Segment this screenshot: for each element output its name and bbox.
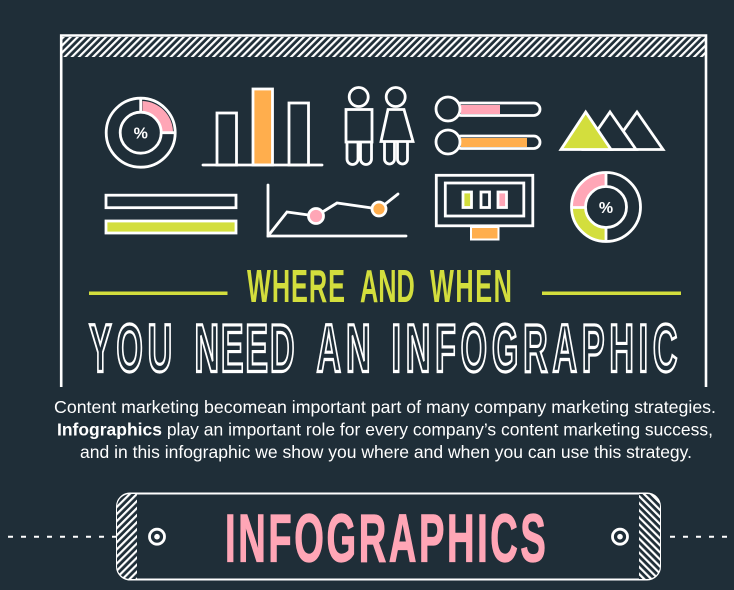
icon: horizontal bars (106, 195, 236, 233)
subheading: where and when: WHEN (430, 260, 513, 312)
icon: second donut chart with percent: % (599, 200, 613, 217)
title: you need an infographic: YOU (89, 311, 177, 387)
icon: donut chart with percent: % (134, 126, 148, 142)
icon: donut chart with percent (106, 98, 175, 167)
icon: man figure (346, 88, 372, 164)
banner text: INFOGRAPHICS (225, 500, 548, 576)
subheading: where and when: AND (360, 260, 415, 312)
icon: bar chart (203, 89, 322, 165)
frame with hatched top band (61, 36, 706, 387)
intro paragraph: Content marketing becomean important part of many company marketing strategies. (54, 397, 716, 417)
subheading: where and when: WHERE (247, 260, 346, 312)
icon: slider thermometers (436, 97, 540, 154)
divider lines beside subheading (89, 292, 681, 295)
icon: right rivet (612, 529, 628, 544)
subheading: where and when (247, 260, 513, 312)
title: you need an infographic: NEED (194, 311, 296, 387)
banner: infographics (117, 494, 660, 580)
icon: monitor (436, 175, 533, 240)
icon: second donut chart with percent (572, 172, 640, 242)
intro paragraph: Infographics play an important role for every company’s content marketing success, (57, 420, 713, 440)
icon: left rivet (150, 529, 164, 544)
title: you need an infographic: AN (316, 311, 376, 387)
icon: mountains (561, 112, 663, 150)
intro paragraph (54, 397, 716, 462)
title: you need an infographic (89, 311, 682, 387)
intro paragraph: and in this infographic we show you where and when you can use this strategy. (80, 442, 692, 462)
icon: woman figure (381, 88, 413, 164)
title: you need an infographic: INFOGRAPHIC (392, 311, 682, 387)
icon: line chart (268, 185, 406, 236)
dashed connector lines (8, 536, 734, 538)
